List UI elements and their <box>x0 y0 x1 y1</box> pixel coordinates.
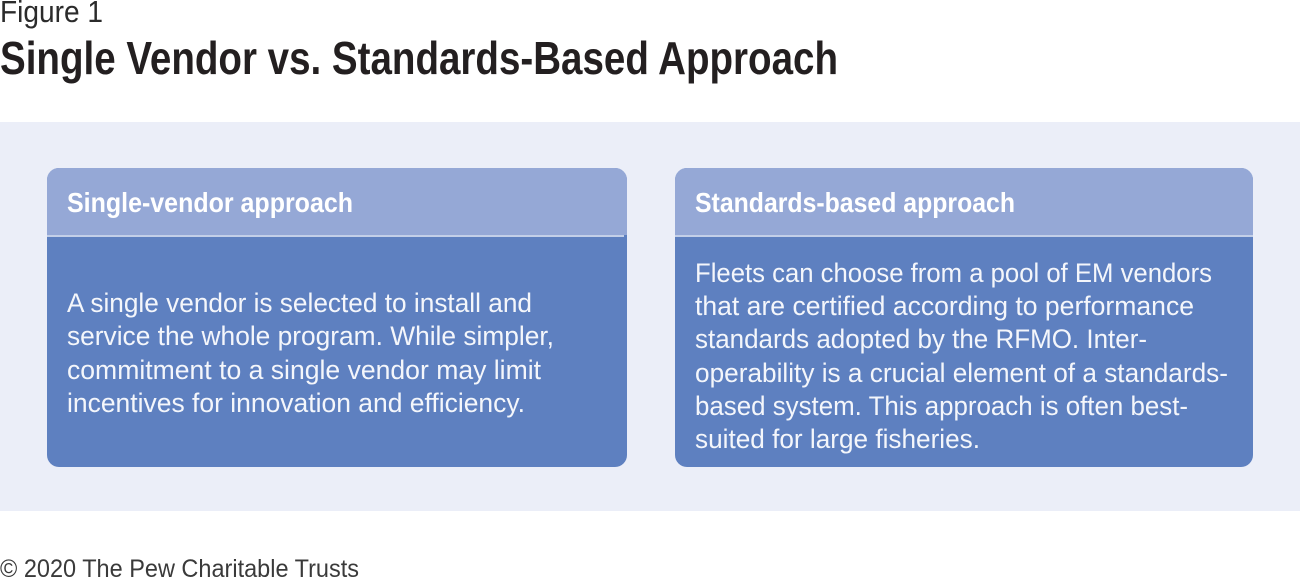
description: standards adopted by the RFMO. Inter- <box>695 324 1147 354</box>
panel: single-vendor approach <box>47 168 627 467</box>
card body <box>675 168 1253 467</box>
title: Single Vendor vs. Standards-Based Approach <box>0 32 838 84</box>
panel: standards-based approach <box>675 168 1253 467</box>
description: based system. This approach is often best- <box>695 391 1188 421</box>
heading: Single-vendor approach <box>67 187 353 218</box>
description: A single vendor is selected to install and <box>67 288 532 318</box>
card header <box>47 168 627 235</box>
heading: Standards-based approach <box>695 187 1015 218</box>
description: Fleets can choose from a pool of EM vendors <box>695 258 1212 288</box>
description: suited for large fisheries. <box>695 424 980 454</box>
description <box>67 288 554 418</box>
description: incentives for innovation and efficiency. <box>67 388 525 418</box>
description: that are certified according to performance <box>695 291 1194 321</box>
background panel <box>0 122 1300 511</box>
card header <box>675 168 1253 235</box>
description: commitment to a single vendor may limit <box>67 355 541 385</box>
description: operability is a crucial element of a standards- <box>695 358 1228 388</box>
description: service the whole program. While simpler, <box>67 321 554 351</box>
description <box>695 258 1228 454</box>
card body <box>47 168 627 467</box>
